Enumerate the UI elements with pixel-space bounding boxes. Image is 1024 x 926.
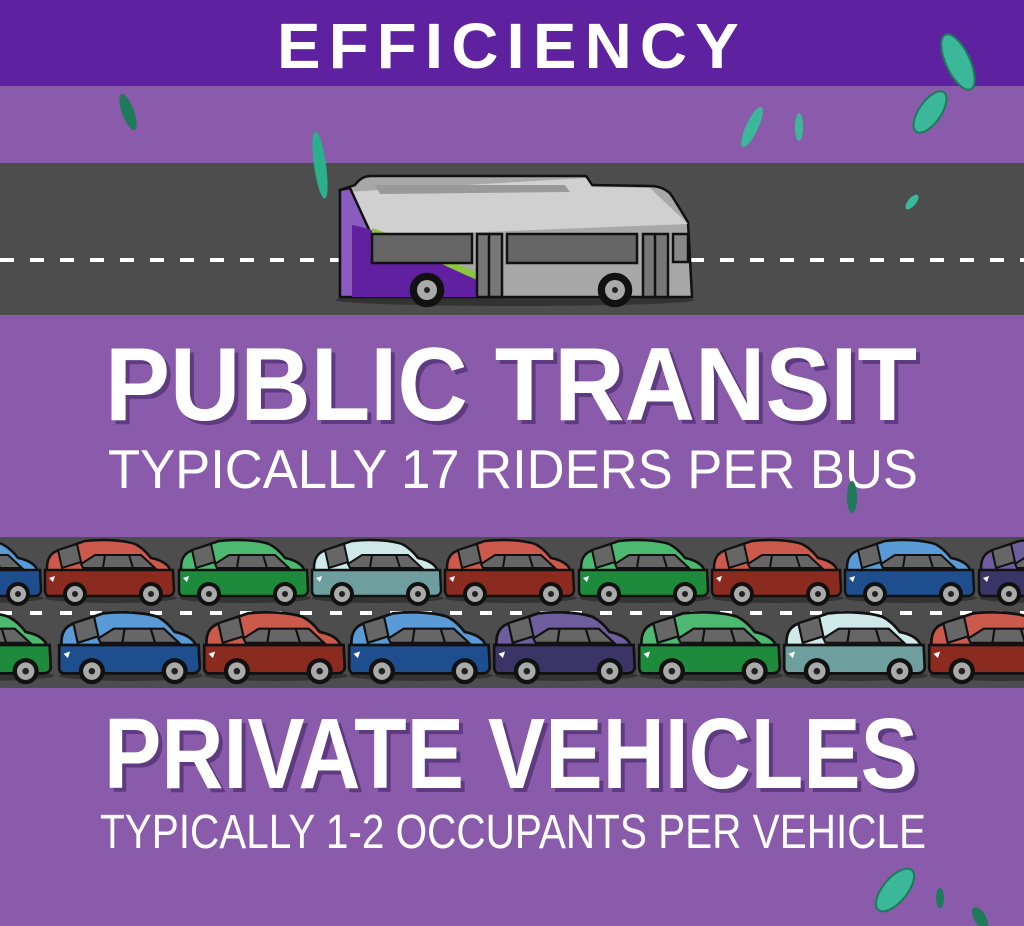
cars row 1 [0,540,1024,606]
heading: private vehicles: PRIVATE VEHICLES [104,698,918,810]
heading: public transit: PUBLIC TRANSIT [105,327,917,443]
road: bus [0,163,1024,315]
road: cars [0,537,1024,688]
icon: bus [335,176,695,306]
title: EFFICIENCY [277,10,747,82]
heading: public transit: PUBLIC TRANSIT [109,331,921,447]
cars row 2 [0,612,1024,684]
header bar [0,0,1024,86]
subtitle: riders per bus: TYPICALLY 17 RIDERS PER BUS [108,438,918,500]
